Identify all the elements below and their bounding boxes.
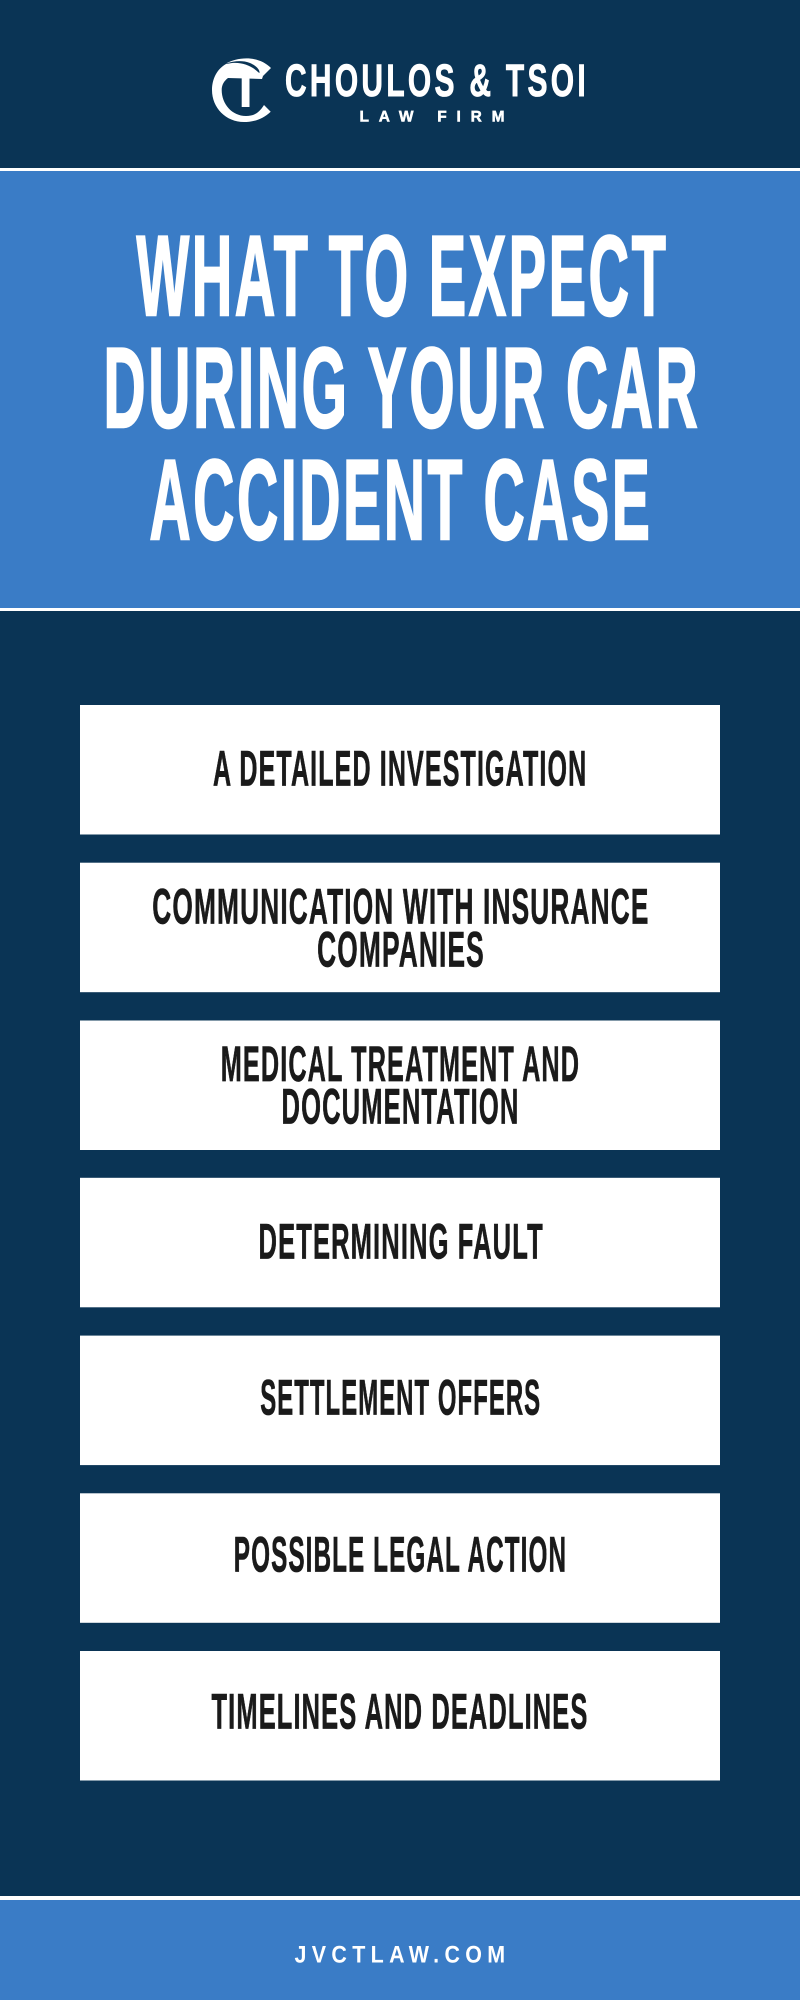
icon: CT monogram [212,58,271,122]
card: communication with insurance companies [80,863,720,992]
title panel [0,168,800,611]
card: timelines and deadlines [80,1651,720,1780]
card: determining fault [80,1178,720,1307]
logo name: CHOULOS & TSOI [285,55,589,106]
footer panel [0,1896,800,2000]
footer website text: JVCTLAW.COM [294,1942,510,1968]
card: medical treatment and documentation: DOCUMENTATION [282,1079,520,1135]
card: possible legal action [80,1493,720,1623]
card: a detailed investigation [80,705,720,834]
logo subtitle: LAW FIRM [360,108,512,126]
list panel [80,705,720,1780]
card: medical treatment and documentation [80,1020,720,1150]
header logo [212,55,589,126]
card: settlement offers [80,1336,720,1465]
card: communication with insurance companies: COMPANIES [317,922,485,978]
title heading [104,213,700,564]
